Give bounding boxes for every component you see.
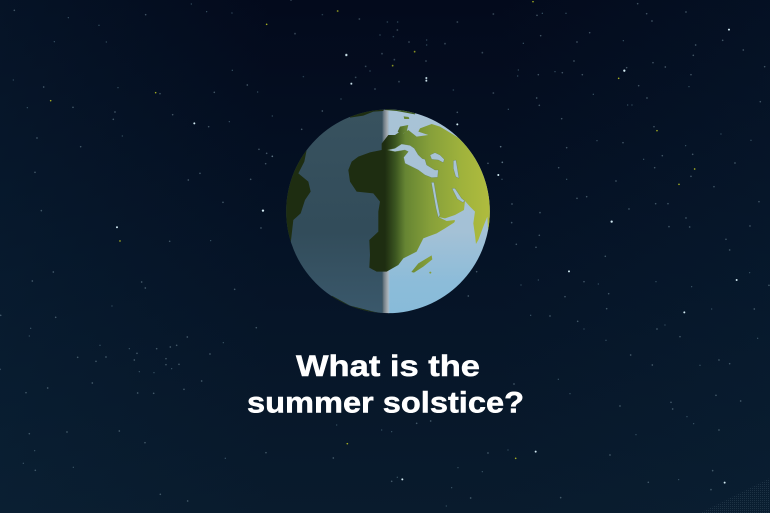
islands: UK, Iceland, Madagascar and others — [398, 116, 455, 274]
land: Africa, Europe and Asia — [348, 124, 503, 272]
globe: Earth half in daylight, half in shadow — [286, 110, 490, 314]
title: What is the — [296, 350, 480, 383]
terminator strip — [382, 108, 389, 315]
title: summer solstice? — [247, 386, 524, 420]
land: shadow-side continents — [286, 110, 416, 313]
ocean: shadow side — [283, 108, 383, 315]
ocean: sunlit side — [388, 108, 492, 315]
seas: Mediterranean, Black Sea, Caspian, Red Sea, Persian Gulf — [388, 144, 465, 218]
